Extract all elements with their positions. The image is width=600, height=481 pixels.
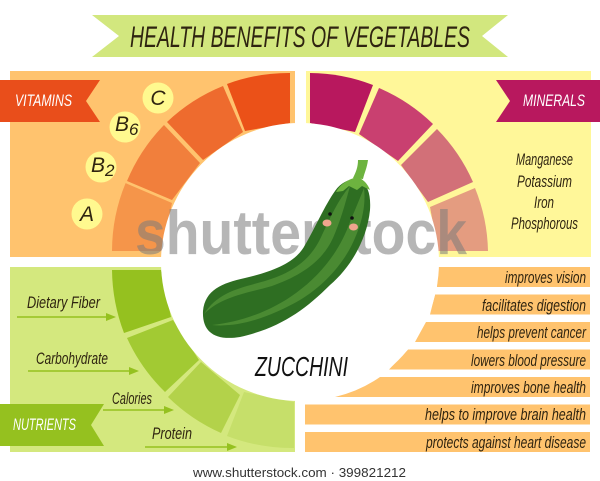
vitamin badge B2: B [91,154,105,177]
minerals list [511,150,578,233]
nutrient label: Calories: Calories [112,389,152,408]
vitamin badge A [72,198,102,230]
watermark: shutterstock [135,199,467,268]
nutrients ribbon [0,404,104,446]
title banner [92,15,508,57]
icon: zucchini [203,160,370,338]
vitamin badge C [142,82,174,114]
minerals list: Potassium [517,172,572,191]
nutrient label: Protein [145,424,237,451]
minerals list: Iron [534,193,554,212]
vitamin badge B6: 6 [129,120,139,139]
panel: nutrients [0,267,295,452]
nutrient label: Protein: Protein [152,424,192,443]
panel: minerals [306,71,600,257]
benefit bars [305,267,590,452]
nutrient label: Carbohydrate [28,349,139,375]
vegetable name: ZUCCHINI [254,351,348,382]
vitamins ribbon [0,80,100,122]
center circle [161,123,439,401]
minerals arc segments [310,73,488,251]
vitamins ribbon: VITAMINS [15,91,72,110]
bar: lowers blood pressure [389,350,590,370]
nutrient label: Carbohydrate: Carbohydrate [36,349,108,368]
nutrient label: Calories [103,389,174,414]
bar: protects against heart disease [305,432,590,452]
bar: helps to improve brain health [305,404,590,424]
nutrients arc segments [112,270,294,448]
vitamin badge B2 [86,152,116,182]
bar: helps prevent cancer [415,322,590,342]
vitamin badge B6: B [115,113,129,136]
vitamin badge B6 [110,112,140,142]
nutrients ribbon: NUTRIENTS [13,415,76,434]
vitamins arc segments [112,73,290,251]
nutrient label: Dietary Fiber [17,293,116,321]
panel: vitamins [0,71,295,257]
bar: facilitates digestion [430,294,590,315]
minerals ribbon [496,80,600,122]
bar: improves bone health [335,377,590,397]
nutrient label: Dietary Fiber: Dietary Fiber [27,293,101,312]
credit line: www.shutterstock.com · 399821212 [192,465,406,480]
bar: improves vision [437,267,590,287]
vitamin badge C: C [150,87,166,110]
vitamin badge B2: 2 [104,161,115,180]
vitamin badge A: A [78,203,94,226]
